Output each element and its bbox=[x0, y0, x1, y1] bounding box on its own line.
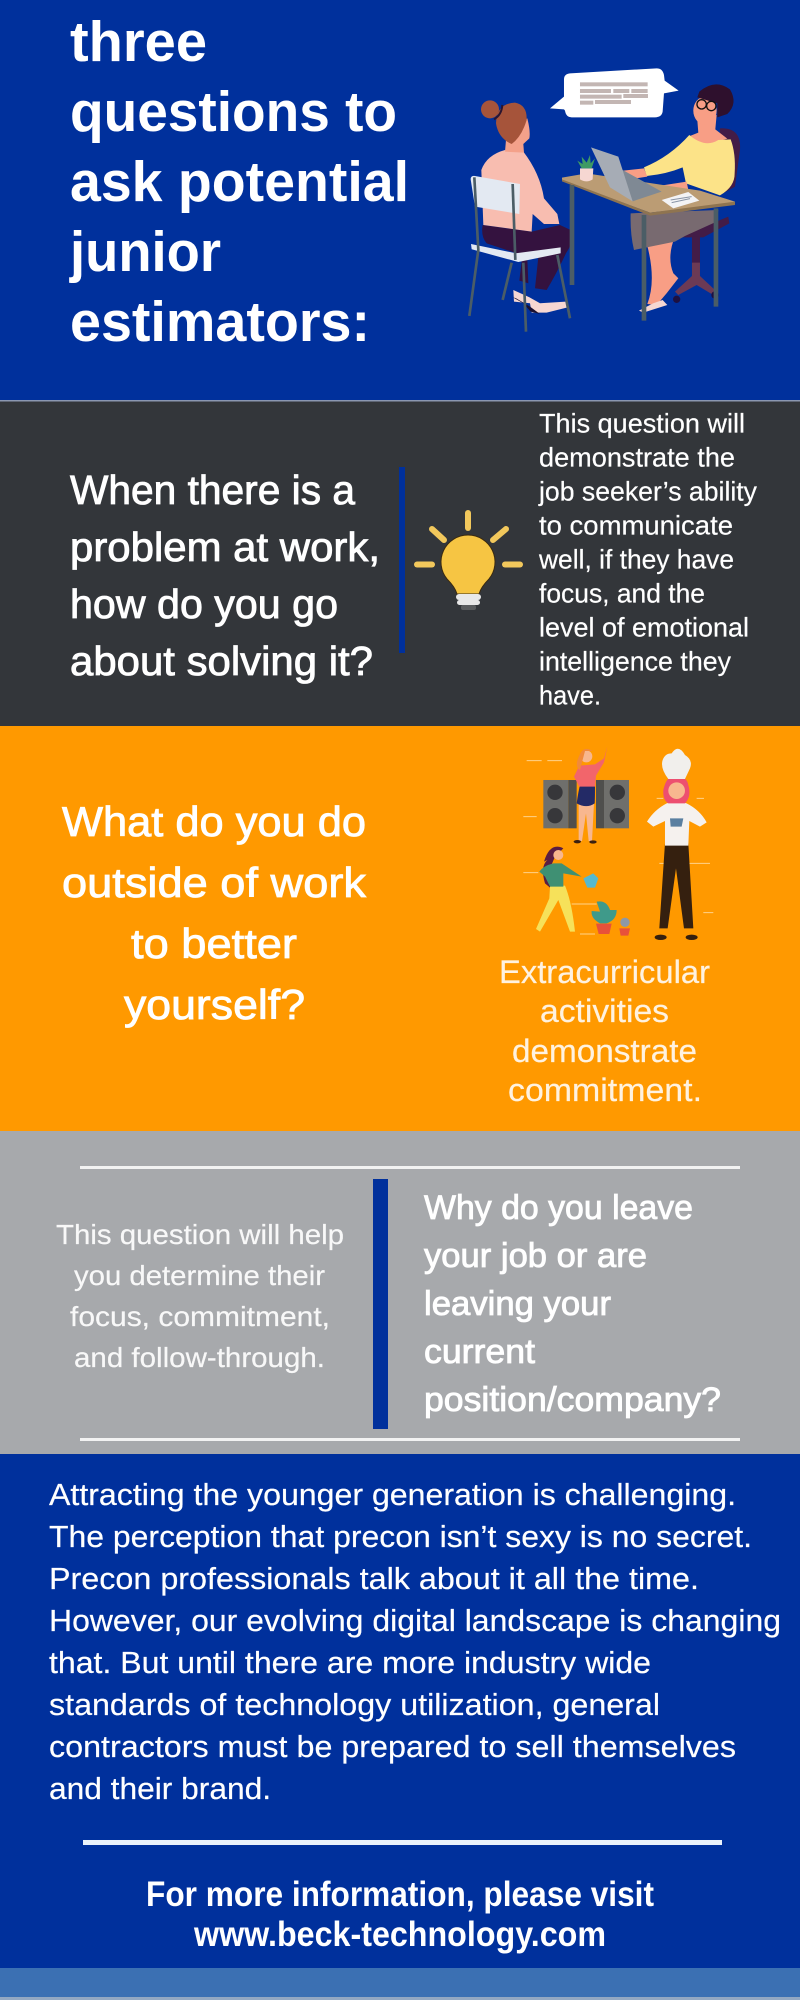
question two explanation bbox=[499, 954, 710, 1108]
title: junior bbox=[69, 220, 221, 284]
closing paragraph: Attracting the younger generation is challenging. bbox=[49, 1477, 736, 1512]
question one explanation bbox=[538, 408, 757, 710]
question one explanation: to communicate bbox=[539, 510, 733, 540]
title: three bbox=[70, 10, 207, 74]
desk with laptop and plant bbox=[562, 147, 735, 321]
question three heading: Why do you leave bbox=[424, 1189, 693, 1227]
question one heading bbox=[70, 467, 380, 684]
closing paragraph: The perception that precon isn’t sexy is no secret. bbox=[49, 1519, 752, 1554]
icon: light bulb bbox=[417, 513, 520, 610]
closing paragraph: contractors must be prepared to sell themselves bbox=[49, 1729, 736, 1764]
question one explanation: level of emotional bbox=[539, 612, 749, 642]
closing paragraph bbox=[49, 1477, 781, 1806]
question two heading: outside of work bbox=[62, 859, 367, 906]
speakers and dancer bbox=[543, 747, 629, 844]
illustration: hobbies bbox=[523, 747, 713, 940]
panel: header bbox=[0, 0, 800, 400]
question one explanation: focus, and the bbox=[539, 578, 705, 608]
question two heading: yourself? bbox=[124, 981, 305, 1028]
question three explanation: you determine their bbox=[74, 1260, 325, 1291]
question three explanation bbox=[56, 1219, 344, 1373]
question three heading: your job or are bbox=[424, 1237, 647, 1275]
question two explanation: Extracurricular bbox=[499, 954, 710, 990]
question one heading: problem at work, bbox=[70, 524, 380, 570]
panel: question three bbox=[0, 1131, 800, 1454]
question three heading: current bbox=[424, 1333, 536, 1371]
title: estimators: bbox=[70, 290, 370, 354]
question one heading: how do you go bbox=[70, 581, 338, 627]
divider bar bbox=[399, 467, 405, 653]
question two explanation: activities bbox=[540, 993, 669, 1029]
question three heading: leaving your bbox=[424, 1285, 611, 1323]
title: questions to bbox=[70, 80, 397, 144]
question three explanation: focus, commitment, bbox=[70, 1301, 330, 1332]
call to action: For more information, please visit bbox=[146, 1875, 654, 1914]
closing paragraph: standards of technology utilization, general bbox=[49, 1687, 660, 1722]
closing paragraph: Precon professionals talk about it all the time. bbox=[49, 1561, 699, 1596]
question three explanation: and follow-through. bbox=[74, 1342, 325, 1373]
question one explanation: intelligence they bbox=[539, 646, 731, 676]
question three explanation: This question will help bbox=[56, 1219, 344, 1250]
question one heading: When there is a bbox=[70, 467, 355, 513]
title: ask potential bbox=[70, 150, 409, 214]
person: candidate bbox=[481, 100, 572, 314]
closing paragraph: However, our evolving digital landscape is changing bbox=[49, 1603, 781, 1638]
decorative streaks bbox=[523, 761, 713, 934]
question one explanation: have. bbox=[539, 680, 601, 710]
question one explanation: This question will bbox=[539, 408, 745, 438]
question two explanation: commitment. bbox=[508, 1072, 702, 1108]
question two heading bbox=[62, 798, 367, 1028]
panel: closing bbox=[0, 1454, 800, 1968]
question two heading: What do you do bbox=[62, 798, 366, 845]
speech bubble bbox=[550, 68, 679, 117]
call to action: www.beck-technology.com bbox=[193, 1915, 606, 1954]
question three heading bbox=[424, 1189, 721, 1419]
question one explanation: well, if they have bbox=[538, 544, 734, 574]
closing paragraph: that. But until there are more industry wide bbox=[49, 1645, 651, 1680]
panel: question two bbox=[0, 726, 800, 1131]
chair bbox=[469, 176, 570, 332]
question one explanation: job seeker’s ability bbox=[538, 476, 757, 506]
question one explanation: demonstrate the bbox=[539, 442, 735, 472]
closing paragraph: and their brand. bbox=[49, 1771, 271, 1806]
divider bar bbox=[373, 1179, 388, 1429]
title bbox=[69, 10, 409, 354]
person: interviewer bbox=[623, 84, 740, 313]
illustration: interview at desk bbox=[469, 68, 740, 332]
chef bbox=[647, 749, 707, 940]
gardener bbox=[536, 847, 630, 936]
question two heading: to better bbox=[131, 920, 297, 967]
question one heading: about solving it? bbox=[70, 638, 373, 684]
footer band bbox=[0, 1968, 800, 2000]
panel: question one bbox=[0, 400, 800, 726]
call to action bbox=[146, 1875, 654, 1954]
question three heading: position/company? bbox=[424, 1381, 721, 1419]
question two explanation: demonstrate bbox=[512, 1033, 697, 1069]
